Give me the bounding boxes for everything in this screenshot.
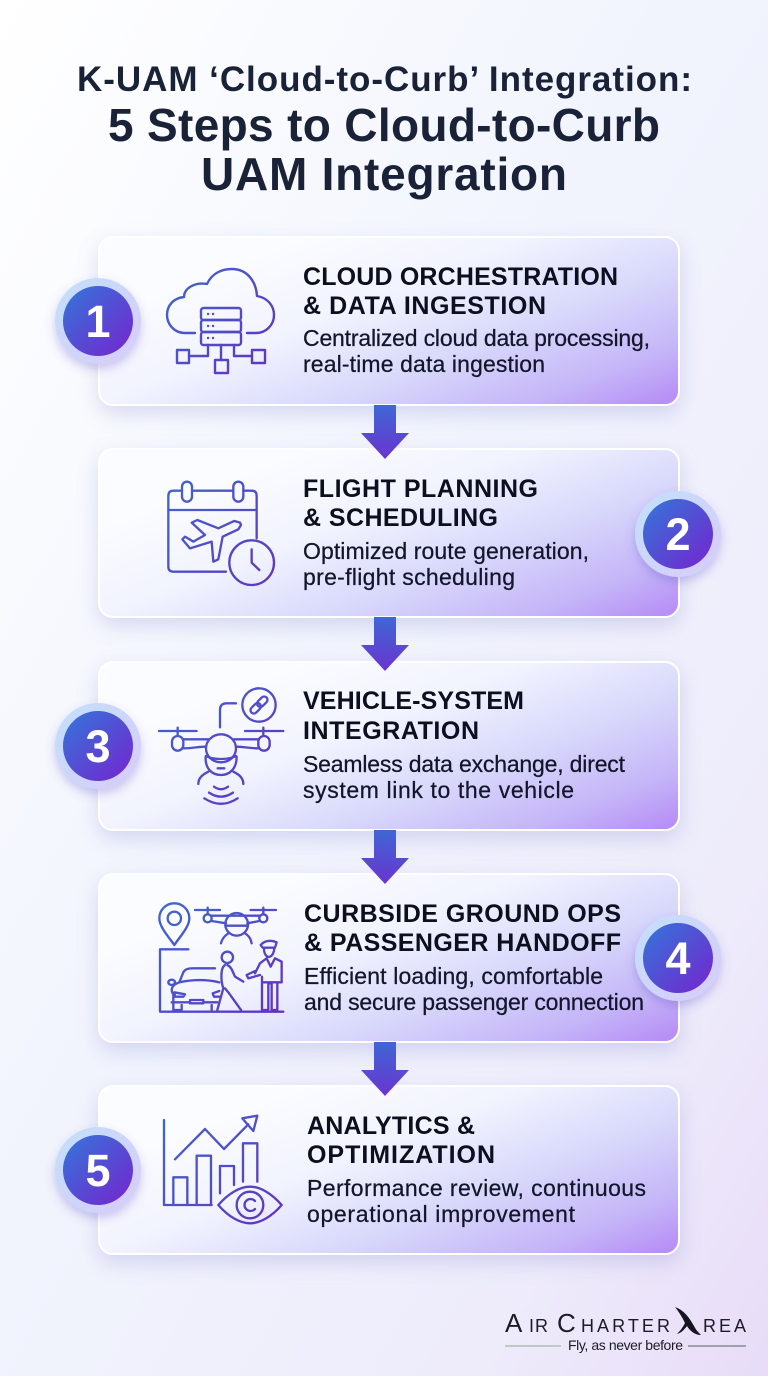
badge 3 — [55, 703, 141, 789]
step 4 text: & PASSENGER HANDOFF — [304, 929, 621, 957]
card 3 background — [99, 662, 679, 830]
logo: Air Charter Korea — [505, 1307, 746, 1353]
step 3 text — [303, 687, 626, 803]
card 4 background — [99, 874, 679, 1042]
step 4 text: CURBSIDE GROUND OPS — [304, 900, 621, 928]
step 4 text — [304, 900, 644, 1015]
step 4 text: and secure passenger connection — [304, 989, 644, 1015]
icon: drone link — [159, 688, 283, 804]
step 2 text — [303, 475, 589, 590]
step 1 text — [303, 263, 650, 377]
step 1 text: real-time data ingestion — [303, 351, 545, 377]
logo: Air Charter Korea: C — [557, 1308, 576, 1338]
step 1 text: & DATA INGESTION — [303, 292, 546, 320]
step 1 text: Centralized cloud data processing, — [303, 325, 650, 351]
arrow 3 to 4 — [361, 830, 409, 884]
step 2 text: & SCHEDULING — [303, 504, 498, 532]
title — [77, 60, 692, 200]
step 4 text: Efficient loading, comfortable — [304, 963, 603, 989]
badge 1 — [55, 278, 141, 364]
icon: curbside handoff — [159, 903, 283, 1012]
badge 2 — [635, 491, 721, 577]
step 3 text: VEHICLE-SYSTEM — [303, 687, 524, 715]
step 3 text: Seamless data exchange, direct — [303, 751, 626, 777]
arrow 2 to 3 — [361, 617, 409, 671]
logo: Air Charter Korea: Fly, as never before — [568, 1337, 683, 1353]
title: 5 Steps to Cloud-to-Curb — [108, 99, 660, 151]
step 3 text: system link to the vehicle — [303, 777, 574, 803]
step 5 text: operational improvement — [307, 1201, 576, 1227]
panel: step 2 flight planning — [99, 449, 679, 617]
badge 4: 4 — [665, 933, 691, 984]
badge 3: 3 — [85, 721, 111, 772]
icon: logo swoosh — [675, 1307, 701, 1335]
panel: step 1 cloud orchestration — [99, 237, 679, 405]
badge 5 — [55, 1127, 141, 1213]
arrow 4 to 5 — [361, 1042, 409, 1096]
step 2 text: pre-flight scheduling — [303, 564, 515, 590]
logo: Air Charter Korea: REA — [703, 1316, 746, 1336]
card 1 background — [99, 237, 679, 405]
step 2 text: FLIGHT PLANNING — [303, 475, 538, 503]
step 2 text: Optimized route generation, — [303, 538, 589, 564]
icon: analytics chart eye — [164, 1116, 282, 1223]
card 2 background — [99, 449, 679, 617]
panel: step 3 vehicle system — [99, 662, 679, 830]
step 5 text — [307, 1112, 646, 1227]
logo: Air Charter Korea: A — [505, 1308, 523, 1338]
step 5 text: Performance review, continuous — [307, 1175, 646, 1201]
badge 5: 5 — [85, 1145, 111, 1196]
logo: Air Charter Korea: IR — [529, 1316, 548, 1336]
icon: cloud server — [167, 269, 274, 373]
title: UAM Integration — [201, 148, 567, 200]
step 1 text: CLOUD ORCHESTRATION — [303, 263, 618, 291]
step 3 text: INTEGRATION — [303, 717, 479, 745]
title: K-UAM ‘Cloud-to-Curb’ Integration: — [77, 60, 692, 99]
arrow 1 to 2 — [361, 405, 409, 459]
step 5 text: OPTIMIZATION — [307, 1141, 495, 1169]
panel: step 4 curbside ground ops — [99, 874, 679, 1042]
card 5 background — [99, 1086, 679, 1254]
badge 4 — [635, 915, 721, 1001]
panel: step 5 analytics — [99, 1086, 679, 1254]
step 5 text: ANALYTICS & — [307, 1112, 475, 1140]
badge 1: 1 — [85, 296, 111, 347]
icon: calendar plane clock — [168, 482, 274, 585]
logo: Air Charter Korea: HARTER — [581, 1316, 670, 1336]
badge 2: 2 — [665, 509, 691, 560]
